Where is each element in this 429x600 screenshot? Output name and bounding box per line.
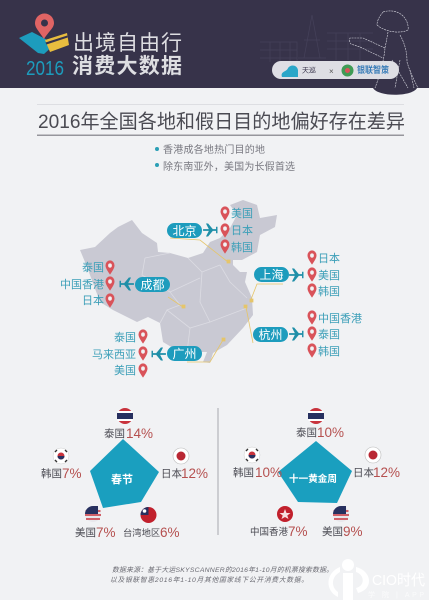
map of China — [80, 200, 277, 363]
logo: pin and cards icon — [19, 14, 69, 54]
Thailand value: 10% — [317, 425, 344, 440]
Hong Kong value: 中国香港 — [250, 526, 289, 538]
watermark: CIO时代: 学 院 | APP — [368, 590, 424, 599]
route: Beijing: 美国 — [231, 207, 253, 220]
route: Hangzhou: 中国香港 — [318, 312, 362, 325]
icon: tianxun cloud — [282, 66, 298, 77]
chart divider — [218, 408, 219, 535]
route: Chengdu: 泰国 — [82, 260, 104, 274]
US value: 7% — [96, 525, 116, 540]
US value: 美国 — [322, 525, 343, 538]
header band — [0, 0, 429, 88]
bullet list — [155, 143, 295, 173]
Thailand flag — [117, 408, 133, 424]
Japan value: 12% — [373, 465, 400, 480]
multiply sign: × — [329, 67, 334, 76]
Hong Kong value: 7% — [288, 524, 308, 539]
Japan value: 日本 — [161, 467, 182, 480]
icon: tower and skyline line art — [260, 15, 373, 62]
Hong Kong flag — [277, 506, 293, 522]
partner logos pill — [272, 61, 399, 79]
Japan flag — [173, 448, 189, 464]
icon: partner shield — [342, 64, 354, 76]
Thailand value: 泰国 — [104, 427, 125, 440]
Taiwan value: 6% — [160, 525, 180, 540]
US flag — [85, 506, 101, 522]
route: Chengdu: 中国香港 — [60, 278, 104, 291]
Korea value: 韩国 — [41, 467, 62, 480]
route: Chengdu — [60, 260, 170, 308]
Japan value: 12% — [181, 466, 208, 481]
partner name: 银联智策 — [357, 64, 389, 75]
pointer lines — [168, 238, 283, 362]
Korea flag — [244, 447, 260, 463]
Taiwan value: 台湾地区 — [123, 527, 160, 538]
heading rule — [37, 103, 404, 106]
title line 2: 消费大数据 — [72, 55, 182, 78]
chart: National Day pentagon — [233, 408, 400, 539]
route: Hangzhou: 杭州 — [258, 327, 283, 342]
Thailand flag — [308, 408, 324, 424]
US value: 美国 — [75, 526, 96, 539]
route: Hangzhou — [253, 310, 362, 358]
route: Shanghai: 日本 — [318, 251, 340, 265]
chart: Spring Festival pentagon: 春节 — [111, 472, 133, 486]
route: Shanghai: 美国 — [318, 269, 340, 282]
route: Guangzhou: 泰国 — [114, 330, 136, 344]
route: Beijing: 北京 — [172, 224, 197, 238]
route: Chengdu: 日本 — [82, 293, 104, 307]
icon: woman traveller line art — [350, 11, 418, 95]
bullet list: 香港成各地热门目的地 — [163, 143, 265, 156]
Korea value: 10% — [255, 465, 282, 480]
route: Hangzhou: 韩国 — [318, 344, 340, 358]
Korea value: 7% — [62, 466, 82, 481]
US value: 9% — [343, 524, 363, 539]
source note — [110, 566, 333, 584]
route: Beijing — [167, 206, 253, 254]
watermark: CIO时代 — [328, 559, 425, 600]
source note: 数据来源：基于大运SKYSCANNER的2016年1-10月的机票搜索数据。 — [112, 566, 333, 574]
Japan value: 日本 — [353, 466, 374, 479]
route: Guangzhou: 广州 — [172, 347, 197, 361]
province borders — [142, 253, 247, 352]
route: Guangzhou — [92, 329, 202, 378]
route: Guangzhou: 马来西亚 — [92, 348, 136, 361]
route: Shanghai: 上海 — [259, 267, 284, 282]
bullet list: 除东南亚外，美国为长假首选 — [163, 160, 295, 173]
US flag — [333, 506, 349, 522]
Korea value: 韩国 — [233, 466, 254, 479]
chart: National Day pentagon: 十一黄金周 — [289, 473, 337, 485]
Taiwan flag — [140, 507, 156, 523]
Thailand value: 14% — [126, 426, 153, 441]
route: Shanghai — [254, 250, 340, 298]
title line 1: 出境自由行 — [73, 32, 182, 55]
route: Guangzhou: 美国 — [114, 364, 136, 377]
route: Beijing: 韩国 — [231, 240, 253, 254]
chart: Spring Festival pentagon — [41, 408, 208, 540]
route: Shanghai: 韩国 — [318, 284, 340, 298]
logo year 2016: 2016 — [26, 58, 64, 80]
route: Beijing: 日本 — [231, 223, 253, 237]
source note: 以及银联智惠2016年1-10月其他国家线下公开消费大数据。 — [110, 576, 308, 584]
watermark: CIO时代: CIO时代 — [372, 572, 425, 589]
Korea flag — [53, 448, 69, 464]
Thailand value: 泰国 — [296, 426, 317, 439]
main heading: 2016年全国各地和假日目的地偏好存在差异 — [38, 111, 405, 133]
tianxun name: 天巡 — [302, 66, 316, 74]
heading underline — [37, 134, 404, 136]
route: Chengdu: 成都 — [140, 278, 165, 292]
route: Hangzhou: 泰国 — [318, 327, 340, 341]
Japan flag — [365, 447, 381, 463]
